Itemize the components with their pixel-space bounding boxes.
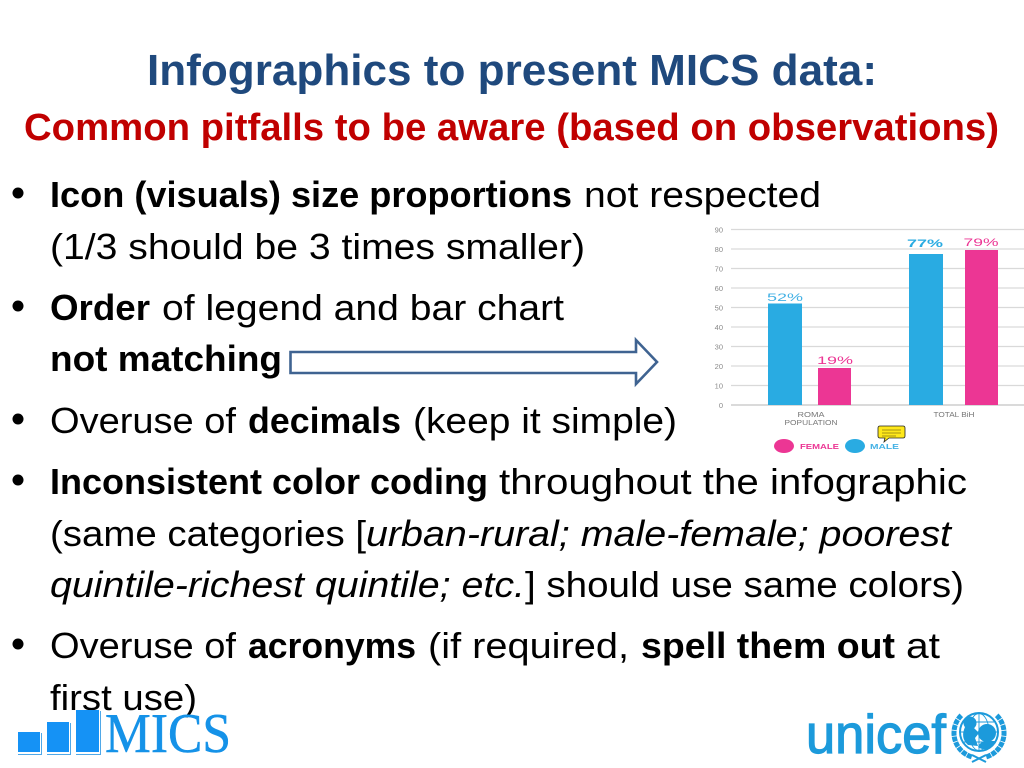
value label 52%: 52% [767,292,803,304]
bullet 1: icon size proportions: Icon (visuals) size proportions [50,174,572,215]
bullet 4: inconsistent color coding [12,461,967,605]
bullet 2: order of legend and bar chart: of legend and bar chart [162,287,564,328]
title: Infographics to present MICS data: [147,46,877,95]
y axis labels: 80 [715,245,723,254]
icon: unicef emblem [954,713,1004,762]
value label 79%: 79% [964,237,999,249]
y axis labels: 10 [715,382,723,390]
legend: FEMALE [800,442,839,451]
category label Roma population: ROMA [798,412,825,419]
bullet 2: order of legend and bar chart [12,287,564,379]
arrow [290,340,657,384]
y axis labels: 50 [715,304,723,312]
bullet 1: icon size proportions: not respected [584,174,821,215]
value label 19%: 19% [817,355,853,367]
bullet list [12,174,967,718]
bullet 3: overuse of decimals: (keep it simple) [413,400,677,441]
y axis labels: 70 [715,264,723,274]
wreath [954,715,1004,757]
bullet 4: inconsistent color coding: Inconsistent color coding [50,461,488,502]
bullet 1: icon size proportions: (1/3 should be 3 times smaller) [50,226,585,267]
bullet 3: overuse of decimals: decimals [248,400,401,441]
globe [960,713,998,751]
bar chart [715,226,1024,453]
y axis labels: 20 [715,362,723,371]
category label Roma population [784,412,838,427]
bullet 4: inconsistent color coding: quintile-richest quintile; etc. [50,564,525,605]
bullet 5: overuse of acronyms: acronyms [248,625,416,666]
y axis labels: 0 [719,401,723,410]
subtitle: Common pitfalls to be aware (based on observations) [24,107,999,149]
MICS logo [18,703,231,765]
bullet 5: overuse of acronyms: first use) [50,677,197,718]
value label 77%: 77% [907,238,943,250]
category label Total BiH: TOTAL BiH [934,412,974,419]
bar: Roma female 19% [818,368,851,405]
unicef wordmark: unicef [806,703,947,765]
category label Roma population: POPULATION [784,420,838,427]
legend: MALE [870,442,899,451]
bullet 3: overuse of decimals: Overuse of [50,400,237,441]
UNICEF logo [806,703,1004,765]
bullet 5: overuse of acronyms: spell them out [641,625,895,666]
bullet 4: inconsistent color coding: urban-rural; male-female; poorest [366,513,953,554]
bar: total female 79% [965,250,998,405]
bullet 2: order of legend and bar chart: Order [50,287,150,328]
bullet 4: inconsistent color coding: ] should use same colors) [525,564,964,605]
children figures [964,716,976,730]
legend [774,439,899,453]
bullet 1: icon size proportions [12,174,821,267]
bullet 5: overuse of acronyms: Overuse of [50,625,237,666]
y axis labels [715,226,723,410]
bullet 5: overuse of acronyms: (if required, [428,625,629,666]
y axis labels: 40 [715,323,723,332]
icon: rising bars [18,710,100,754]
bullet 4: inconsistent color coding: throughout the infographic [499,461,967,502]
bullet 2: order of legend and bar chart: not matching [50,338,282,379]
bullet 4: inconsistent color coding: (same categories [ [50,513,366,554]
bullet 3: overuse of decimals [12,400,677,441]
y axis labels: 30 [715,342,723,352]
bullet 5: overuse of acronyms: at [906,625,940,666]
y axis labels: 60 [715,284,723,293]
bar: Roma male 52% [768,304,802,405]
bar: total male 77% [909,254,943,405]
icon: yellow comment note [878,426,905,442]
y axis labels: 90 [715,226,723,234]
bullet 5: overuse of acronyms [12,625,940,718]
MICS wordmark: MICS [105,703,231,765]
